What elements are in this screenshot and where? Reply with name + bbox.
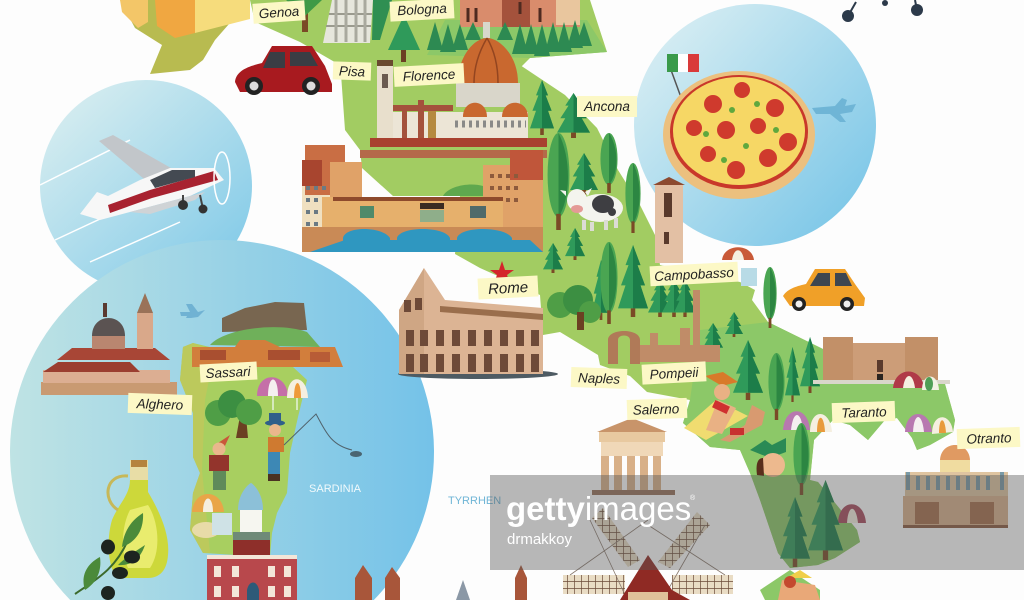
label: Alghero: Alghero: [135, 396, 184, 413]
watermark: gettyimages: drmakkoy: [507, 531, 573, 548]
icon: Sardinia castle and town: [192, 302, 343, 367]
icon: yellow car: [783, 269, 865, 311]
icon: sunbathers: [684, 372, 765, 442]
map: Sicily tip: [760, 570, 820, 600]
icon: Palermo spires: [355, 565, 527, 600]
panel: pizza circle: [634, 4, 876, 246]
icon: cypress and firs south: [780, 423, 843, 567]
label: Pisa: [333, 61, 371, 81]
label: SARDINIA: SARDINIA: [309, 483, 362, 495]
icon: Ponte Vecchio: [302, 145, 543, 252]
watermark: gettyimages: gettyimages: [506, 490, 691, 527]
icon: Pompeii ruins: [608, 290, 720, 364]
icon: beach umbrella and chair: [192, 494, 232, 538]
icon: red car: [235, 46, 332, 95]
watermark: gettyimages: [490, 475, 1024, 570]
icon: bottom sunbather: [778, 570, 820, 600]
label: Taranto: [832, 401, 895, 423]
label: Genoa: Genoa: [258, 4, 300, 21]
icon: lighthouse and red building: [207, 483, 297, 600]
icon: propeller plane: [80, 135, 230, 220]
label: Sassari: Sassari: [205, 364, 252, 381]
icon: church left: [41, 293, 177, 395]
icon: Otranto palace: [903, 445, 1008, 528]
trees: northern Apennines: [530, 80, 820, 420]
icon: man with green hat: [750, 438, 786, 477]
icon: leaning tower of Pisa: [286, 0, 392, 43]
icon: star Rome: [490, 261, 514, 283]
icon: small plane Sardinia: [180, 304, 205, 318]
icon: castle Taranto: [813, 337, 950, 384]
panel: Sardinia sea circle: [10, 240, 434, 600]
map: northern Italy: [250, 0, 607, 68]
icon: Colosseum: [398, 268, 558, 379]
icon: cheese: [120, 0, 250, 38]
label: Salerno: [627, 398, 687, 420]
icon: beach umbrellas: [722, 247, 953, 523]
label: Otranto: [957, 427, 1020, 449]
label: Pompeii: Pompeii: [649, 365, 700, 382]
label: Naples: [571, 367, 627, 389]
icon: olive oil bottle: [75, 460, 168, 600]
icon: windmill: [563, 508, 733, 600]
icon: pizza: [663, 71, 815, 199]
icon: flag on pizza: [667, 54, 699, 100]
icon: Bologna buildings and forest: [427, 0, 607, 58]
map: Sardinia island: [180, 343, 307, 557]
map: southern Italy: [683, 322, 955, 568]
icon: bush by Ponte Vecchio: [443, 184, 483, 196]
label: Naples: Naples: [578, 370, 620, 387]
icon: Florence cathedral: [360, 22, 547, 158]
icon: bell tower Campobasso: [653, 177, 685, 263]
label: Pisa: Pisa: [339, 64, 366, 79]
label: Genoa: [252, 0, 306, 24]
icon: oak tree: [205, 390, 262, 438]
map: central Italy: [340, 60, 955, 568]
icon: cow: [560, 188, 623, 231]
label: Ancona: [577, 96, 637, 117]
panel: plane circle: [40, 80, 252, 292]
icon: beach umbrellas Sardinia: [257, 377, 308, 410]
icon: fisherman: [265, 413, 362, 481]
label: Ancona: Ancona: [583, 99, 630, 114]
label: Salerno: Salerno: [632, 401, 680, 418]
icon: farmer: [209, 435, 230, 490]
label: Taranto: Taranto: [841, 404, 887, 421]
label: Alghero: [128, 393, 192, 415]
label: Florence: [394, 63, 464, 87]
watermark: gettyimages: ®: [690, 494, 696, 502]
label: Campobasso: Campobasso: [654, 265, 735, 284]
map: north-west lobe: [120, 0, 250, 74]
icon: small blue plane: [812, 98, 856, 122]
icon: tree near Bologna: [388, 15, 420, 62]
label: Pompeii: [642, 361, 706, 385]
labels: city names: [128, 0, 1020, 449]
label: Rome: Rome: [488, 279, 529, 298]
label: Otranto: Otranto: [966, 430, 1012, 447]
label: Bologna: [390, 0, 454, 22]
label: Sassari: [200, 361, 257, 382]
label: Rome: [478, 275, 539, 300]
label: Bologna: Bologna: [397, 1, 448, 18]
icon: hanging decoration top right: [842, 0, 923, 22]
label: Florence: Florence: [402, 67, 456, 84]
icon: Greek temple: [592, 418, 675, 495]
label: TYRRHENIAN sea: TYRRHEN: [448, 495, 501, 507]
